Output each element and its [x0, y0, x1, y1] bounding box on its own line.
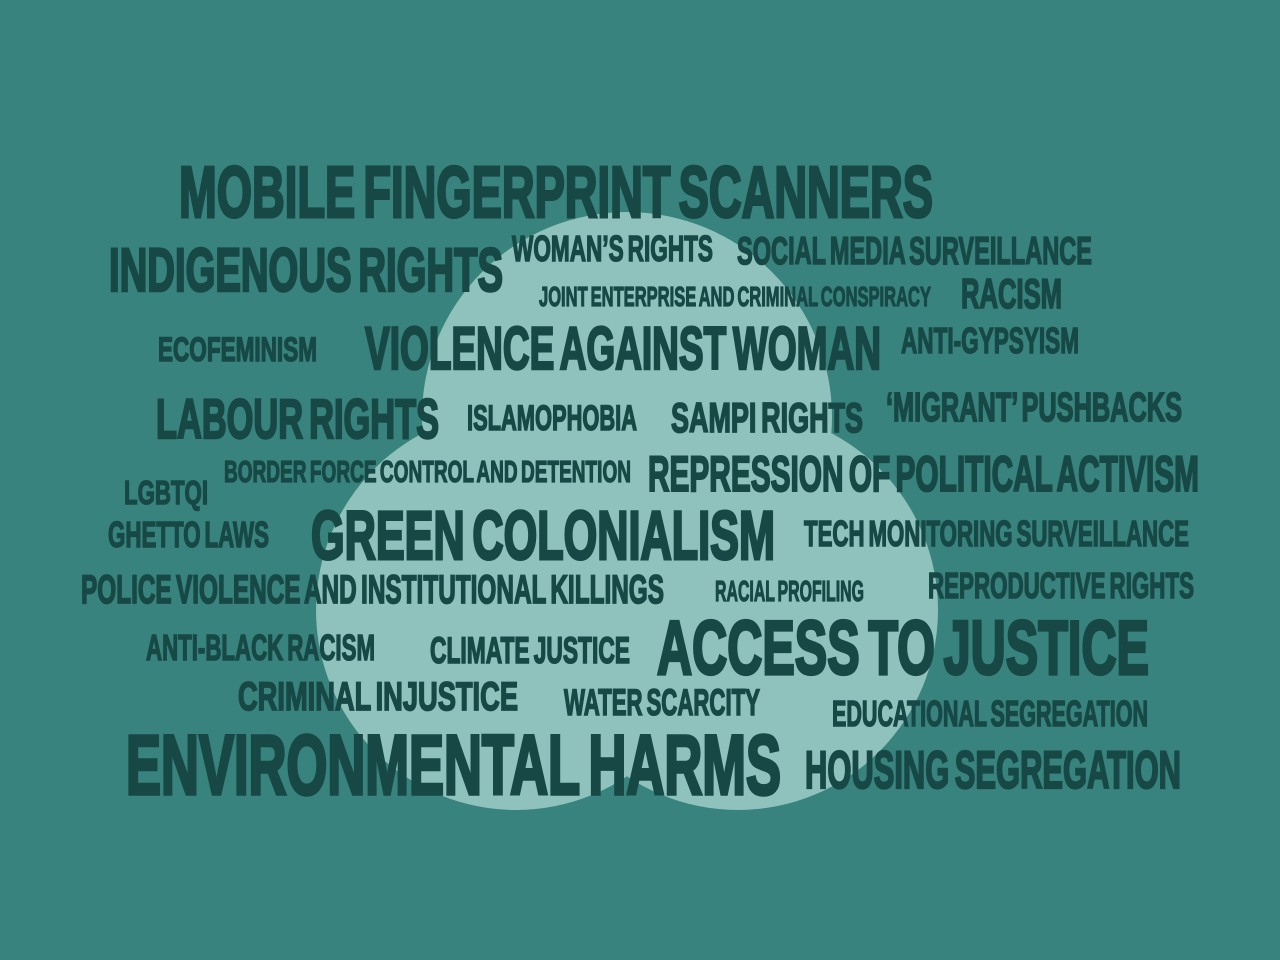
term: anti-gypsyism: ANTI-GYPSYISM [901, 320, 1079, 361]
term: green colonialism: GREEN COLONIALISM [311, 497, 775, 574]
term: joint enterprise and criminal conspiracy: JOINT ENTERPRISE AND CRIMINAL CONSPIRACY [539, 281, 931, 312]
trefoil blob shape [316, 212, 938, 810]
term: climate justice: CLIMATE JUSTICE [430, 630, 630, 671]
term: criminal injustice: CRIMINAL INJUSTICE [238, 675, 518, 719]
term: lgbtqi: LGBTQI [124, 474, 208, 511]
term: environmental harms: ENVIRONMENTAL HARMS [126, 718, 781, 812]
term: border force control and detention: BORDER FORCE CONTROL AND DETENTION [224, 454, 631, 489]
word cloud terms [81, 153, 1199, 812]
term: sampi rights: SAMPI RIGHTS [671, 394, 863, 441]
term: ghetto laws: GHETTO LAWS [108, 514, 269, 555]
term: water scarcity: WATER SCARCITY [564, 682, 760, 723]
term: islamophobia: ISLAMOPHOBIA [467, 399, 637, 438]
term: indigenous rights: INDIGENOUS RIGHTS [109, 236, 503, 304]
term: racism: RACISM [961, 270, 1062, 317]
term: labour rights: LABOUR RIGHTS [156, 387, 439, 450]
term: police violence and institutional killings: POLICE VIOLENCE AND INSTITUTIONAL KILLINGS [81, 568, 664, 612]
term: woman's rights: WOMAN’S RIGHTS [512, 228, 713, 269]
term: violence against woman: VIOLENCE AGAINST WOMAN [365, 315, 881, 382]
term: racial profiling: RACIAL PROFILING [715, 576, 864, 608]
term: ecofeminism: ECOFEMINISM [158, 331, 317, 369]
term: anti-black racism: ANTI-BLACK RACISM [146, 627, 375, 668]
